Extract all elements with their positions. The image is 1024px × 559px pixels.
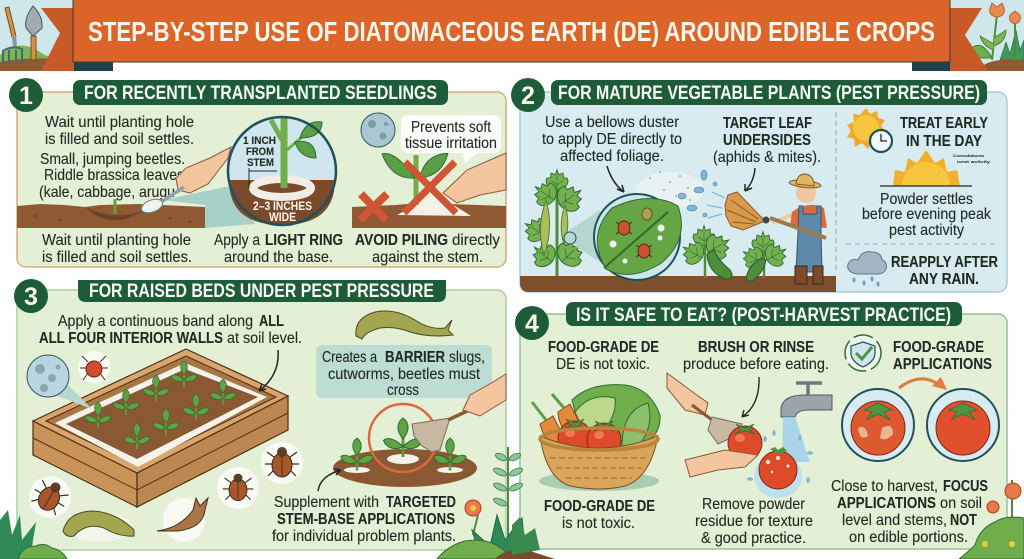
vegetable basket: [532, 385, 660, 491]
apply band text: at soil level.: [227, 330, 302, 347]
panel 3 heading: 3: [24, 283, 38, 311]
hand with spoon: [140, 147, 231, 215]
panel 3 heading: [14, 279, 446, 313]
red mite icon: [78, 351, 110, 383]
barrier callout: BARRIER: [385, 349, 445, 366]
left text block about beetles: Riddle brassica leaves: [44, 167, 184, 184]
food-grade heading: FOOD-GRADE DE: [548, 339, 659, 356]
callout bubble: Prevents soft: [411, 119, 491, 136]
harvest caption: on edible portions.: [849, 529, 968, 546]
food grade caption: [544, 498, 655, 532]
supplement text: Supplement with: [274, 494, 379, 511]
remove powder caption: Remove powder: [702, 496, 806, 513]
food grade caption: is not toxic.: [562, 515, 635, 532]
apply band text: ALL: [259, 313, 284, 330]
apply band text: ALL FOUR INTERIOR WALLS: [39, 330, 223, 347]
panel 4: safe to eat: [515, 302, 1007, 549]
harvest caption: Close to harvest,: [831, 478, 938, 495]
panel 4 heading: [515, 302, 962, 340]
bellows text: affected foliage.: [560, 148, 664, 165]
shield check icon: [845, 335, 881, 371]
cucumber plants: [678, 226, 791, 281]
treat early heading: [900, 115, 988, 150]
panel 1 captions: [42, 232, 500, 266]
food-grade applications heading: FOOD-GRADE: [893, 339, 984, 356]
powder settles text: before evening peak: [862, 206, 992, 223]
barrier callout: cutworms, beetles must: [328, 366, 480, 383]
tiny sun note: [953, 154, 990, 164]
supplement text: for individual problem plants.: [272, 528, 456, 545]
right hand: [443, 153, 506, 203]
treat early heading: IN THE DAY: [906, 133, 982, 150]
arrow between plates: [899, 377, 947, 390]
panel 2 heading: [511, 78, 987, 112]
harvest caption: [831, 478, 988, 546]
panel 1 captions: Apply a: [214, 232, 260, 249]
target leaf text: (aphids & mites).: [713, 149, 821, 166]
tall vegetable plant: [519, 170, 589, 276]
ground: [520, 276, 836, 292]
barrier callout: [316, 345, 492, 399]
powder settles text: pest activity: [889, 222, 964, 239]
distance label: 1 INCH: [243, 135, 276, 147]
soil with planting hole: [17, 199, 205, 228]
sun with clock icon: [847, 108, 892, 152]
panel 4 heading: IS IT SAFE TO EAT? (POST-HARVEST PRACTICE): [576, 304, 951, 326]
panel 2 heading: 2: [521, 82, 535, 110]
barrier callout: slugs,: [449, 349, 485, 366]
soil and powder pile with crossed-out plant: [352, 153, 506, 228]
panel 4 heading: 4: [525, 310, 539, 338]
supplement text: [272, 494, 456, 545]
cutworm and slug: [63, 498, 208, 542]
water faucet: [747, 383, 832, 498]
decorative plants bottom right: [959, 480, 1024, 559]
supplement text: TARGETED: [386, 494, 456, 511]
brush or rinse heading: BRUSH OR RINSE: [698, 339, 814, 356]
remove powder caption: residue for texture: [695, 513, 813, 530]
harvest caption: FOCUS: [943, 478, 988, 495]
left text block about beetles: (kale, cabbage, arugu: [39, 184, 175, 201]
diatom icon with cone: [27, 355, 92, 409]
bellows text: Use a bellows duster: [545, 114, 680, 131]
panel 1 heading: FOR RECENTLY TRANSPLANTED SEEDLINGS: [84, 82, 437, 104]
harvest caption: APPLICATIONS: [837, 495, 936, 512]
callout bubble: [401, 115, 501, 163]
decorative plants bottom centre: [437, 447, 555, 559]
bellows text: to apply DE directly to: [542, 131, 682, 148]
treat early heading: TREAT EARLY: [900, 115, 988, 132]
arrows to magnifier: [607, 166, 755, 192]
food-grade heading: DE is not toxic.: [556, 356, 650, 373]
panel 3 heading: FOR RAISED BEDS UNDER PEST PRESSURE: [89, 280, 434, 302]
title banner: [41, 0, 988, 71]
top slug: [356, 311, 453, 339]
powder settles text: Powder settles: [880, 191, 973, 208]
left text block about beetles: Small, jumping beetles.: [40, 151, 185, 168]
brush or rinse heading: produce before eating.: [683, 356, 829, 373]
divider: [836, 112, 997, 270]
panel 1 heading: [9, 78, 448, 112]
panel 1 captions: around the base.: [224, 249, 333, 266]
left text block about beetles: [39, 114, 194, 201]
plate with dusted tomato: [842, 389, 914, 461]
panel 1 captions: LIGHT RING: [265, 232, 343, 249]
plate with clean tomato: [927, 389, 999, 461]
bellows text: [542, 114, 682, 165]
distance label: STEM: [247, 157, 274, 169]
width label: 2–3 INCHES: [253, 201, 312, 213]
seedlings in bed: [85, 361, 236, 449]
powder settles text: [862, 191, 992, 239]
barrier callout: Creates a: [322, 349, 377, 366]
apply band text: Apply a continuous band along: [58, 313, 253, 330]
callout bubble: tissue irritation: [405, 135, 497, 152]
width label: [253, 201, 312, 224]
red cross marks: [360, 162, 456, 220]
zoom cone: [163, 186, 255, 228]
panel 1 captions: against the stem.: [372, 249, 483, 266]
magnified ring circle: [228, 117, 336, 225]
panel 1 captions: is filled and soil settles.: [42, 249, 192, 266]
magnifier on leaf with mites: [564, 194, 681, 280]
setting sun: [880, 150, 972, 186]
farmer with duster: [725, 174, 827, 284]
brush or rinse heading: [683, 339, 829, 373]
dust cloud and spray: [636, 170, 725, 218]
rain cloud icon: [848, 252, 886, 287]
header right illustration: flowers: [950, 0, 1024, 71]
panel 1 captions: AVOID PILING: [355, 232, 448, 249]
barrier callout: cross: [387, 382, 419, 399]
decorative plants bottom left: [0, 510, 67, 559]
panel 1: recently transplanted seedlings: [9, 78, 506, 267]
curved arrow: [318, 469, 341, 491]
supplement text: STEM-BASE APPLICATIONS: [277, 511, 455, 528]
panel 2: mature vegetable plants: [511, 78, 1007, 292]
food-grade applications heading: APPLICATIONS: [893, 356, 992, 373]
remove powder caption: [695, 496, 813, 547]
tiny sun note: Comodiatoms: [953, 154, 984, 158]
moon-like diatom icon: [361, 113, 395, 147]
distance label: [243, 135, 277, 188]
left text block about beetles: Wait until planting hole: [45, 114, 194, 131]
harvest caption: on soil: [940, 495, 982, 512]
width label: WIDE: [269, 212, 296, 224]
distance label: FROM: [246, 146, 274, 158]
arrow to bed wall: [259, 350, 278, 391]
soil patch with targeted plants: [333, 404, 477, 487]
harvest caption: NOT: [950, 512, 977, 529]
harvest caption: level and stems,: [842, 512, 947, 529]
panel 1 captions: Wait until planting hole: [42, 232, 191, 249]
raised wooden bed: [33, 349, 288, 507]
target leaf text: [713, 115, 821, 166]
target leaf text: TARGET LEAF: [723, 115, 812, 132]
food-grade heading: [548, 339, 659, 373]
reapply text: REAPPLY AFTER: [891, 254, 998, 271]
header left illustration: garden tools: [0, 0, 74, 71]
reapply text: ANY RAIN.: [909, 271, 979, 288]
panel 1 heading: 1: [19, 82, 33, 110]
hand with brush: [412, 374, 506, 452]
food grade caption: FOOD-GRADE DE: [544, 498, 655, 515]
hands brushing tomato: [667, 373, 762, 477]
reapply text: [891, 254, 998, 288]
arrow to brush: [742, 377, 759, 417]
panel 3: raised beds: [14, 279, 506, 550]
tiny sun note: nest activity: [957, 159, 990, 164]
target leaf text: UNDERSIDES: [723, 132, 811, 149]
remove powder caption: & good practice.: [701, 530, 806, 547]
left text block about beetles: is filled and soil settles.: [45, 131, 194, 148]
food-grade applications heading: [893, 339, 992, 373]
panel 1 captions: directly: [452, 232, 500, 249]
beetle icons: [28, 442, 303, 518]
apply band text: [39, 313, 302, 347]
